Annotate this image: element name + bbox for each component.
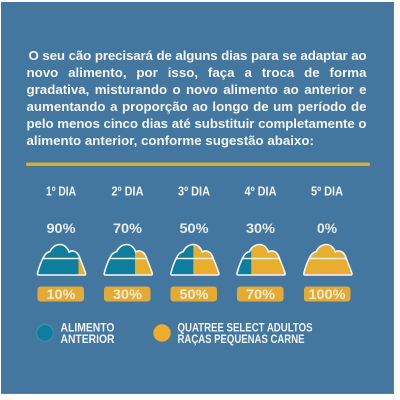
icon: bowl 50/50 [171,244,219,275]
percentage: previous food day 5: 0% [317,220,338,236]
pill: new food day 2: 30% [113,286,143,302]
text block: introduction [26,48,367,148]
heading: day 4: 4º DIA [244,184,277,198]
heading: day 3: 3º DIA [178,184,211,198]
heading: day 5: 5º DIA [311,184,344,198]
icon: bowl 0/100 [304,244,352,275]
pill: new food day 4: 70% [246,286,276,302]
column: day 1 [37,184,86,302]
icon: bowl 90/10 [37,244,86,275]
legend: new food: QUATREE SELECT ADULTOS [178,321,312,335]
text block: introduction: novo alimento, por isso, faça a troca de forma [26,65,366,80]
legend: new food [153,321,312,346]
legend: previous food [37,321,115,346]
icon: bowl 70/30 [104,244,152,275]
legend: previous food: ALIMENTO [60,321,114,335]
percentage: previous food day 1: 90% [46,220,76,236]
pill: new food day 3: 50% [180,286,209,302]
legend: previous food: ANTERIOR [60,332,115,346]
column: day 5 [304,184,352,302]
heading: day 2: 2º DIA [112,184,144,198]
column: day 3 [170,184,219,302]
percentage: previous food day 4: 30% [246,220,276,236]
pill: new food day 1: 10% [46,286,76,302]
column: day 4 [237,184,285,302]
percentage: previous food day 2: 70% [113,220,143,236]
text block: introduction: O seu cão precisará de alguns dias para se adaptar ao [28,48,366,63]
pill: new food day 5: 100% [308,286,346,302]
divider: yellow rule [26,162,370,166]
text block: introduction: alimento anterior, conforme sugestão abaixo: [26,133,314,148]
heading: day 1: 1º DIA [46,184,76,198]
text block: introduction: pelo menos cinco dias até substituir completamente o [26,116,366,131]
icon: bowl 30/70 [237,244,285,275]
text block: introduction: gradativa, misturando o novo alimento ao anterior e [26,82,366,97]
percentage: previous food day 3: 50% [180,220,209,236]
text block: introduction: aumentando a proporção ao longo de um período de [26,99,366,114]
legend: new food: RAÇAS PEQUENAS CARNE [178,332,304,346]
column: day 2 [104,184,152,302]
